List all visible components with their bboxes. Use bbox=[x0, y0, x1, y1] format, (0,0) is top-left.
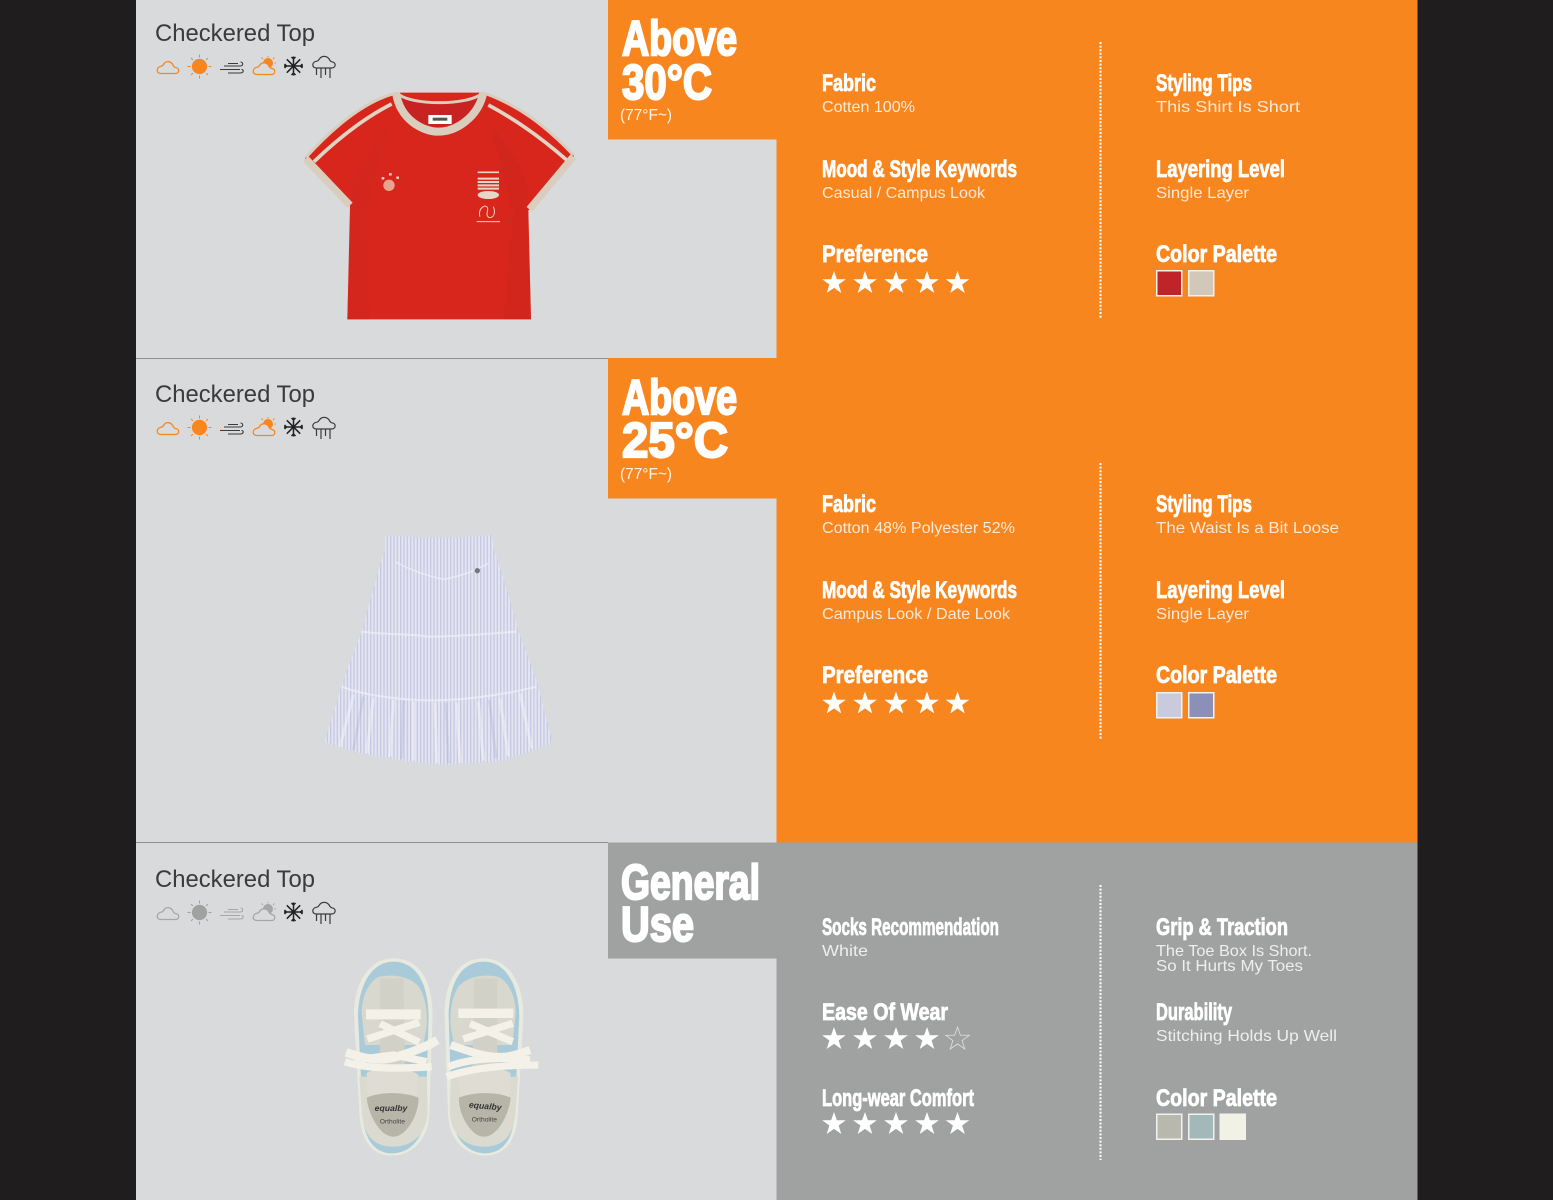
spec: preference rating bbox=[822, 241, 969, 293]
spec: color palette: Color Palette bbox=[1156, 662, 1277, 689]
spec: preference rating: Preference bbox=[822, 241, 928, 268]
spec: styling tips: Styling Tips bbox=[1156, 491, 1252, 518]
spec: grip and traction: The Toe Box Is Short. bbox=[1156, 943, 1312, 960]
spec: layering level: Single Layer bbox=[1156, 606, 1250, 623]
header box: general use: General bbox=[621, 856, 760, 910]
right shoe bbox=[445, 958, 538, 1156]
header box: general use: Use bbox=[621, 898, 694, 952]
spec: color palette bbox=[1156, 662, 1277, 718]
spec: color palette: Color Palette bbox=[1156, 241, 1277, 268]
spec: color palette bbox=[1156, 1085, 1277, 1139]
header box: temperature bbox=[608, 0, 777, 140]
spec: layering level bbox=[1156, 577, 1285, 623]
panel: general use row bbox=[136, 842, 1418, 1200]
spec: fabric: Fabric bbox=[822, 70, 876, 97]
spec: mood and style keywords: Campus Look / Date Look bbox=[822, 606, 1011, 623]
spec: fabric: Cotton 48% Polyester 52% bbox=[822, 520, 1015, 537]
spec: fabric: Cotten 100% bbox=[822, 99, 915, 116]
spec: layering level: Layering Level bbox=[1156, 577, 1285, 604]
spec: mood and style keywords: Mood & Style Keywords bbox=[822, 156, 1017, 183]
spec: color palette bbox=[1156, 241, 1277, 296]
spec: grip and traction bbox=[1156, 914, 1312, 975]
spec: mood and style keywords: Mood & Style Keywords bbox=[822, 577, 1017, 604]
spec: durability: Durability bbox=[1156, 999, 1232, 1026]
spec: styling tips bbox=[1156, 70, 1301, 116]
spec: mood and style keywords bbox=[822, 577, 1017, 623]
heading: product name: Checkered Top bbox=[155, 866, 315, 893]
spec: mood and style keywords bbox=[822, 156, 1017, 202]
right shoe: Ortholite bbox=[472, 1117, 497, 1124]
spec: styling tips: The Waist Is a Bit Loose bbox=[1156, 520, 1339, 537]
spec: layering level bbox=[1156, 156, 1285, 202]
spec: socks recommendation: Socks Recommendation bbox=[822, 914, 999, 941]
spec: grip and traction: So It Hurts My Toes bbox=[1156, 958, 1303, 975]
icon row: weather bbox=[157, 54, 335, 78]
header box: temperature: Above bbox=[622, 12, 737, 66]
left shoe: equalby bbox=[375, 1103, 409, 1113]
icon row: weather bbox=[157, 416, 335, 440]
spec: ease of wear rating: Ease Of Wear bbox=[822, 999, 948, 1026]
heading: product name: Checkered Top bbox=[155, 20, 315, 47]
spec: durability bbox=[1156, 999, 1337, 1045]
header box: temperature: Above bbox=[622, 371, 737, 425]
header box: general use bbox=[608, 842, 777, 958]
spec: fabric: Fabric bbox=[822, 491, 876, 518]
header box: temperature: (77°F~) bbox=[620, 107, 672, 124]
spec: fabric bbox=[822, 70, 915, 116]
spec: mood and style keywords: Casual / Campus Look bbox=[822, 185, 986, 202]
header box: temperature: (77°F~) bbox=[620, 466, 672, 483]
spec: layering level: Single Layer bbox=[1156, 185, 1250, 202]
illustration: striped tiered skirt bbox=[325, 535, 553, 765]
header box: temperature: 25°C bbox=[622, 414, 728, 468]
spec: grip and traction: Grip & Traction bbox=[1156, 914, 1288, 941]
right shoe: equalby bbox=[469, 1100, 503, 1113]
spec: long-wear comfort rating bbox=[822, 1085, 974, 1134]
spec: long-wear comfort rating: Long-wear Comfort bbox=[822, 1085, 974, 1112]
left shoe: Ortholite bbox=[380, 1118, 405, 1125]
spec: color palette: Color Palette bbox=[1156, 1085, 1277, 1112]
spec: durability: Stitching Holds Up Well bbox=[1156, 1028, 1337, 1045]
spec: styling tips bbox=[1156, 491, 1339, 537]
illustration: red t-shirt bbox=[305, 93, 574, 319]
icon row: weather bbox=[157, 900, 335, 924]
illustration: sneakers bbox=[345, 958, 538, 1156]
left shoe bbox=[345, 958, 437, 1156]
header box: temperature bbox=[608, 358, 777, 498]
heading: product name: Checkered Top bbox=[155, 381, 315, 408]
spec: preference rating bbox=[822, 662, 969, 714]
spec: styling tips: Styling Tips bbox=[1156, 70, 1252, 97]
spec: layering level: Layering Level bbox=[1156, 156, 1285, 183]
spec: socks recommendation: White bbox=[822, 943, 868, 960]
spec: ease of wear rating bbox=[822, 999, 969, 1049]
panel: above 25C row bbox=[136, 358, 1418, 843]
panel: above 30C row bbox=[136, 0, 1418, 358]
spec: preference rating: Preference bbox=[822, 662, 928, 689]
spec: fabric bbox=[822, 491, 1015, 537]
spec: socks recommendation bbox=[822, 914, 999, 960]
spec: styling tips: This Shirt Is Short bbox=[1156, 99, 1301, 116]
header box: temperature: 30°C bbox=[622, 56, 712, 110]
